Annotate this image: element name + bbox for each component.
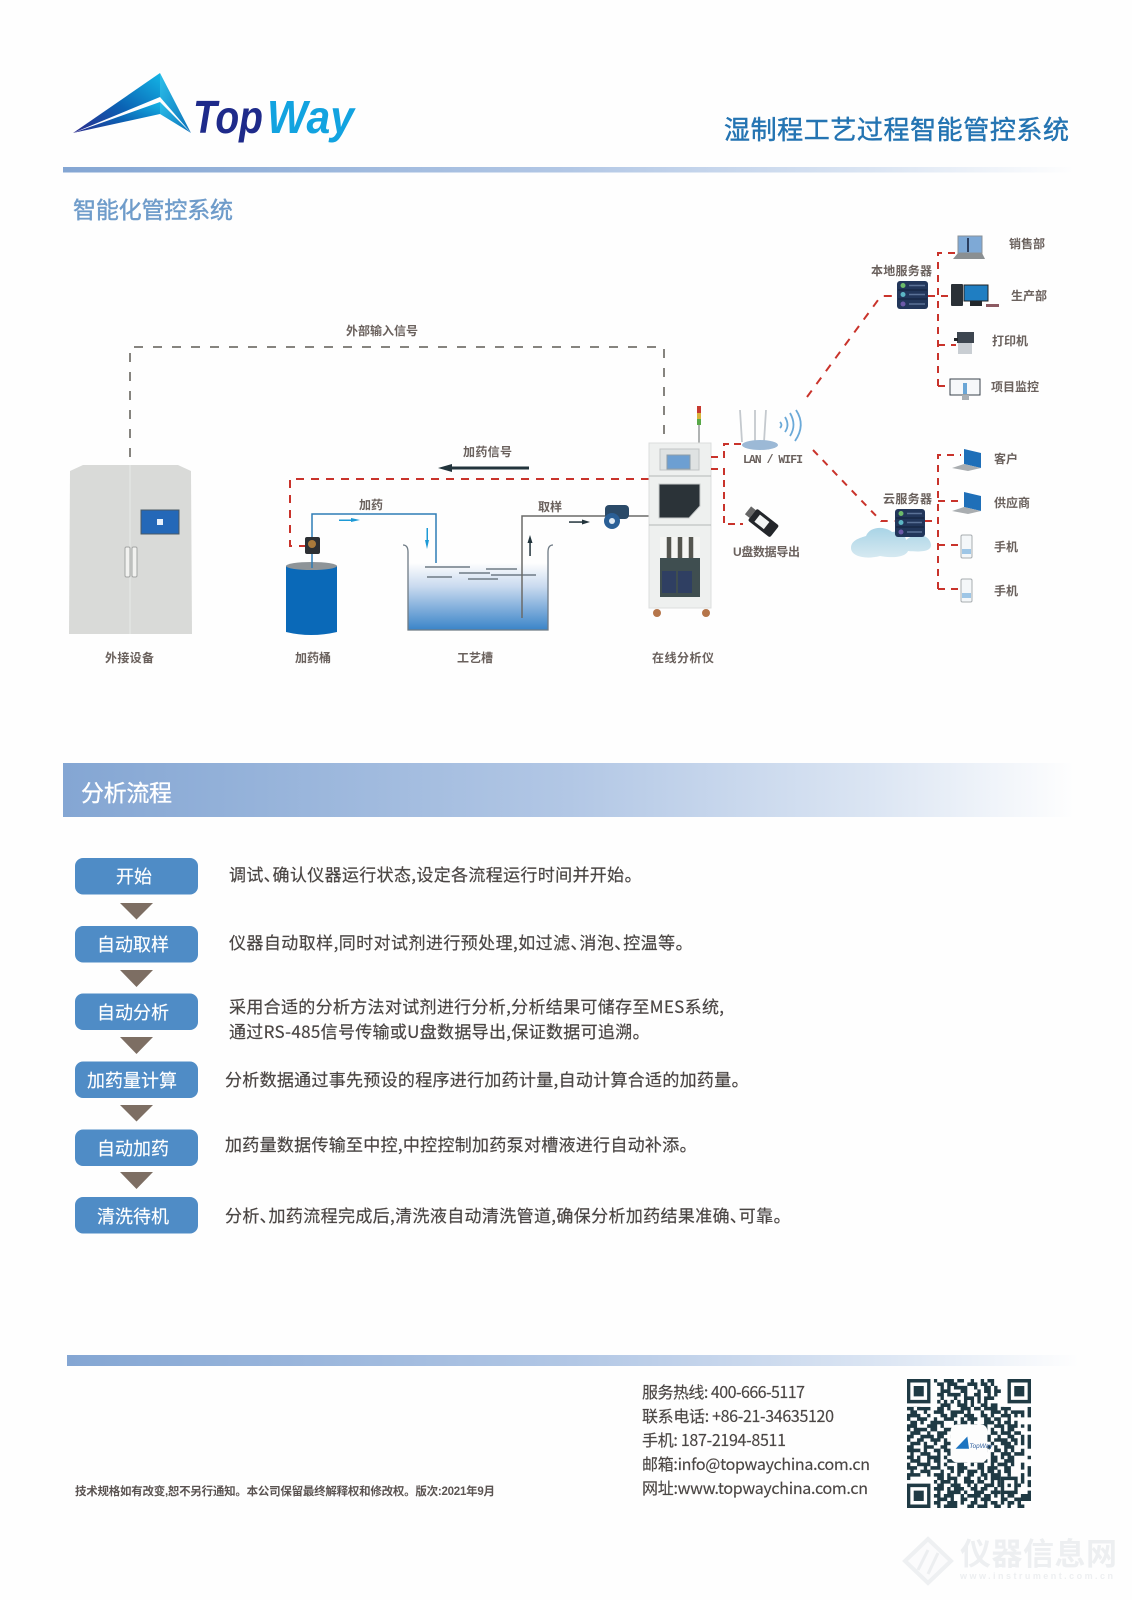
label: 本地服务器: 本地服务器 — [871, 263, 932, 278]
description 1: 调试、确认仪器运行状态,设定各流程运行时间并开始。 — [229, 861, 633, 886]
label: 外接设备: 外接设备 — [105, 650, 154, 665]
step: 开始 — [75, 858, 198, 894]
external cabinet — [69, 465, 192, 634]
heading: 智能化管控系统: 智能化管控系统 — [73, 191, 233, 225]
step: 清洗待机 — [75, 1197, 198, 1234]
logo: TopWay — [73, 73, 356, 143]
system diagram — [69, 236, 1047, 665]
QR code: TopWay — [969, 1443, 993, 1450]
description 3: 通过RS-485信号传输或U盘数据导出,保证数据可追溯。 — [229, 1018, 641, 1043]
step: 自动分析: 自动分析 — [97, 999, 169, 1025]
cloud server icon — [895, 509, 925, 537]
process flow — [75, 858, 782, 1234]
icon: laptop supplier — [952, 492, 981, 514]
contact details: 服务热线: 400-666-5117 — [642, 1379, 805, 1403]
label: 销售部: 销售部 — [1009, 236, 1045, 251]
watermark — [905, 1537, 1117, 1583]
footer divider bar — [67, 1355, 1080, 1366]
cloud — [851, 528, 931, 558]
icon: phone 1 — [961, 535, 972, 558]
label: 供应商: 供应商 — [994, 495, 1030, 510]
label: U盘数据导出: U盘数据导出 — [733, 544, 800, 559]
link to local server — [807, 296, 897, 397]
label: 生产部: 生产部 — [1011, 288, 1047, 303]
dosing signal dashed line — [290, 479, 649, 546]
label: 取样: 取样 — [538, 499, 562, 514]
process tank — [403, 545, 553, 630]
step: 加药量计算 — [75, 1062, 198, 1098]
arrow 3 — [120, 1037, 153, 1054]
contact details: 网址:www.topwaychina.com.cn — [642, 1475, 868, 1499]
step: 清洗待机: 清洗待机 — [97, 1203, 169, 1229]
link to cloud server — [813, 450, 895, 521]
watermark: 仪器信息网 — [960, 1537, 1117, 1572]
icon: monitor — [950, 379, 980, 400]
icon: phone 2 — [961, 579, 972, 602]
sampling pipe — [522, 516, 649, 618]
description 3 — [229, 993, 724, 1043]
label: 加药: 加药 — [359, 497, 383, 512]
icon: laptop customer — [952, 449, 981, 471]
cloud network branches — [925, 455, 961, 589]
contact details: 手机: 187-2194-8511 — [642, 1427, 786, 1451]
description 2: 仪器自动取样,同时对试剂进行预处理,如过滤、消泡、控温等。 — [229, 929, 684, 954]
label: 客户: 客户 — [994, 451, 1018, 466]
logo: TopWay: Way — [267, 91, 356, 143]
local server icon — [897, 281, 928, 309]
local network branches — [928, 253, 960, 386]
label: 工艺槽: 工艺槽 — [457, 650, 493, 665]
label: 手机 1: 手机 — [994, 539, 1018, 554]
contact details — [642, 1379, 870, 1499]
label: LAN / WIFI: LAN / WIFI — [743, 454, 803, 467]
step: 自动取样 — [75, 926, 198, 962]
label: 手机 2: 手机 — [994, 583, 1018, 598]
dosing pump — [305, 537, 320, 554]
arrow 4 — [120, 1105, 153, 1122]
step: 自动加药: 自动加药 — [97, 1135, 169, 1161]
description 4: 分析数据通过事先预设的程序进行加药计量,自动计算合适的加药量。 — [225, 1066, 740, 1091]
label: 项目监控: 项目监控 — [991, 379, 1039, 394]
arrow 2 — [120, 970, 153, 987]
arrow 5 — [120, 1172, 153, 1189]
flow arrows: black — [528, 520, 590, 556]
step: 自动分析 — [75, 994, 198, 1030]
icon: laptop sales — [953, 236, 985, 259]
QR code — [907, 1379, 1031, 1508]
external signal dashed line — [130, 347, 664, 457]
section band: 分析流程: 分析流程 — [81, 774, 172, 808]
label: 加药桶: 加药桶 — [295, 650, 331, 665]
router with wifi — [740, 410, 801, 450]
contact details: 邮箱:info@topwaychina.com.cn — [642, 1451, 870, 1475]
watermark: www.instrument.com.cn — [959, 1571, 1113, 1581]
title: 湿制程工艺过程智能管控系统 — [724, 110, 1069, 147]
online analyzer — [649, 406, 711, 617]
arrow: dosing signal — [438, 464, 529, 472]
step: 自动取样: 自动取样 — [97, 931, 169, 957]
label: 打印机: 打印机 — [992, 333, 1028, 348]
label: 在线分析仪: 在线分析仪 — [652, 650, 714, 665]
step: 自动加药 — [75, 1130, 198, 1166]
description 5: 加药量数据传输至中控,中控控制加药泵对槽液进行自动补添。 — [225, 1131, 688, 1156]
sampling pump — [604, 505, 629, 529]
step: 开始: 开始 — [116, 863, 152, 889]
dosing pipe — [312, 514, 436, 593]
icon: desktop computer — [951, 284, 999, 307]
LAN and USB dashed links — [711, 444, 743, 524]
dosing barrel — [286, 562, 337, 635]
USB drive — [743, 505, 779, 538]
label: 云服务器: 云服务器 — [883, 491, 932, 506]
logo: TopWay: Top — [193, 91, 263, 143]
icon: printer — [954, 332, 974, 354]
contact details: 联系电话: +86-21-34635120 — [642, 1403, 834, 1427]
disclaimer: 技术规格如有改变,恕不另行通知。本公司保留最终解释权和修改权。版次:2021年9月 — [75, 1484, 495, 1498]
description 6: 分析、加药流程完成后,清洗液自动清洗管道,确保分析加药结果准确、可靠。 — [225, 1202, 782, 1227]
section band: 分析流程 — [63, 763, 1075, 817]
arrow 1 — [120, 903, 153, 920]
label: 加药信号: 加药信号 — [463, 444, 512, 459]
description 3: 采用合适的分析方法对试剂进行分析,分析结果可储存至MES系统, — [229, 993, 724, 1018]
step: 加药量计算: 加药量计算 — [87, 1067, 177, 1093]
flow arrows: blue — [339, 518, 429, 549]
top divider bar — [63, 167, 1075, 172]
label: external input signal: 外部输入信号 — [346, 323, 418, 338]
